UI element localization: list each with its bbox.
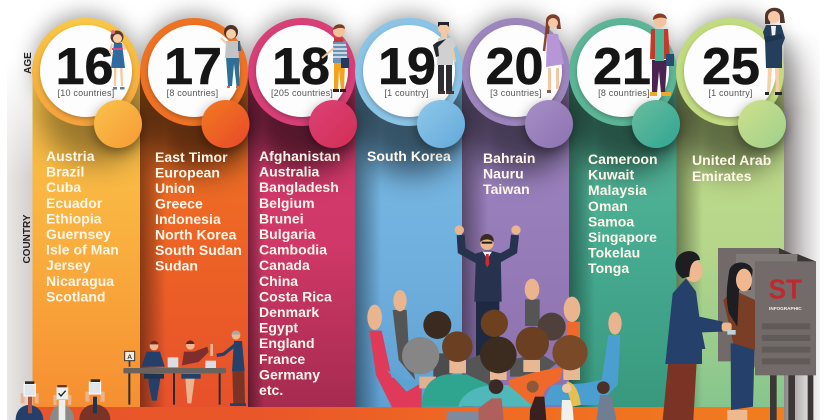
panel: country list 18: China [259, 273, 298, 289]
panel: country list 18: Denmark [259, 304, 319, 320]
age 21 badge: [8 countries] [598, 88, 650, 98]
illustration: polling table [123, 331, 246, 406]
panel: country list 21: Tokelau [588, 245, 640, 261]
panel: country list 21: Oman [588, 198, 628, 214]
age 19 badge [355, 18, 465, 148]
panel: country list 18: Belgium [259, 195, 315, 211]
panel: country list 17: Greece [155, 196, 203, 212]
clerk 1 [141, 341, 165, 401]
panel: country list 18: Australia [259, 164, 320, 180]
panel: age 18 column [248, 72, 355, 407]
panel: country list 18: etc. [259, 382, 283, 398]
voters in front [447, 379, 616, 420]
panel: country list 16: Cuba [46, 179, 81, 195]
panel: country list 16: Ethiopia [46, 210, 102, 226]
panel: country list 18: Egypt [259, 320, 298, 336]
woman voter [723, 262, 755, 420]
age 21 badge: 21 [593, 38, 651, 96]
man voter [663, 251, 736, 420]
booth front panel with logo [755, 261, 816, 375]
panel: country list 16: Ecuador [46, 195, 103, 211]
clerk 2 [181, 340, 213, 403]
age 21 badge [569, 18, 680, 148]
panel: country list 17: South Sudan [155, 242, 242, 258]
panel: country list 18: Afghanistan [259, 148, 340, 164]
panel: age 20 column [462, 80, 569, 407]
icon: girl age 16 [110, 30, 125, 90]
sign A: A [127, 354, 132, 361]
panel: country list 25: Emirates [692, 168, 752, 184]
panel: country list 20 [483, 150, 535, 197]
icon: girl age 17 [221, 25, 241, 88]
age 20 badge: 20 [486, 38, 543, 96]
panel: country list 18: Costa Rica [259, 288, 332, 304]
panel: country list 18: Brunei [259, 210, 304, 226]
panel: age 16 column [32, 72, 140, 407]
icon: young man age 21 [650, 13, 674, 96]
panel: country list 16: Jersey [46, 257, 91, 273]
age 18 badge: 18 [272, 38, 330, 96]
age 19 badge: [1 country] [384, 88, 429, 98]
panel: country list 17 [155, 149, 242, 274]
panel: country list 18: Cambodia [259, 242, 327, 258]
raised hands [367, 279, 622, 407]
panel: country list 25 [692, 152, 771, 184]
panel: country list 17: European [155, 164, 220, 180]
illustration: speaker and crowd [367, 225, 622, 420]
panel: country list 16: Nicaragua [46, 273, 114, 289]
panel: country list 18: England [259, 335, 315, 351]
audience [402, 310, 620, 407]
panel: country list 21: Samoa [588, 213, 634, 229]
panel: country list 21: Cameroon [588, 151, 658, 167]
panel: country list 21 [588, 151, 658, 276]
illustration: people holding ballots [16, 379, 110, 420]
panel: country list 21: Kuwait [588, 167, 634, 183]
panel: country list 18: France [259, 351, 305, 367]
age 18 badge [248, 18, 357, 148]
age 19 badge: 19 [378, 38, 436, 96]
icon: businesswoman age 25 [763, 8, 785, 95]
label: age: AGE [23, 52, 34, 74]
panel: country list 16: Brazil [46, 164, 84, 180]
illustration: voting booth [663, 248, 816, 420]
age 25 badge: [1 country] [708, 88, 753, 98]
panel: country list 21: Tonga [588, 260, 629, 276]
official [217, 331, 246, 406]
label: country: COUNTRY [22, 214, 33, 264]
panel: country list 17: North Korea [155, 226, 237, 242]
age 18 badge: [205 countries] [271, 88, 333, 98]
booth front panel with logo: INFOGRAPHIC [769, 306, 802, 311]
panel: country list 18: Canada [259, 257, 310, 273]
panel: country list 16 [46, 148, 119, 304]
panel: country list 18 [259, 148, 340, 398]
age 25 badge: 25 [702, 38, 760, 96]
icon: student age 18 [322, 24, 349, 92]
panel: age 21 column [569, 79, 676, 407]
speaker [455, 225, 521, 358]
age 17 badge: [8 countries] [167, 88, 218, 98]
panel: country list 18: Bangladesh [259, 179, 339, 195]
panel: country list 16: Scotland [46, 288, 106, 304]
panel: country list 18: Germany [259, 366, 320, 382]
icon: girl age 20 [544, 14, 564, 93]
text: country list 19: South Korea [367, 148, 451, 164]
panel: country list 20: Bahrain [483, 150, 535, 166]
panel: country list 25: United Arab [692, 152, 771, 168]
age 17 badge: 17 [164, 38, 222, 96]
age 20 badge [462, 18, 573, 148]
panel: country list 16: Guernsey [46, 226, 111, 242]
panel: country list 21: Singapore [588, 229, 657, 245]
panel: country list 18: Bulgaria [259, 226, 316, 242]
ballot voter 2 [50, 385, 74, 420]
age 17 badge [140, 18, 250, 148]
age 16 badge [32, 18, 142, 148]
panel: country list 20: Taiwan [483, 181, 530, 197]
ballot voter 3 [79, 379, 110, 420]
bottom band [32, 407, 784, 420]
table [123, 357, 226, 405]
age 25 badge [676, 18, 786, 148]
panel: country list 20: Nauru [483, 166, 524, 182]
panel: age 17 column [140, 72, 248, 407]
panel: country list 21: Malaysia [588, 182, 647, 198]
panel: country list 17: East Timor [155, 149, 228, 165]
panel: country list 17: Union [155, 180, 195, 196]
age 20 badge: [3 countries] [490, 88, 542, 98]
booth front panel with logo: ST [769, 273, 802, 304]
age 16 badge: [10 countries] [58, 88, 114, 98]
panel: age 25 column [676, 73, 784, 407]
panel: country list 17: Sudan [155, 258, 198, 274]
panel: age 19 column [355, 80, 462, 407]
age 16 badge: 16 [56, 38, 113, 96]
panel: country list 17: Indonesia [155, 211, 221, 227]
icon: young man age 19 [433, 22, 456, 94]
panel: country list 16: Isle of Man [46, 242, 119, 258]
panel: country list 16: Austria [46, 148, 95, 164]
